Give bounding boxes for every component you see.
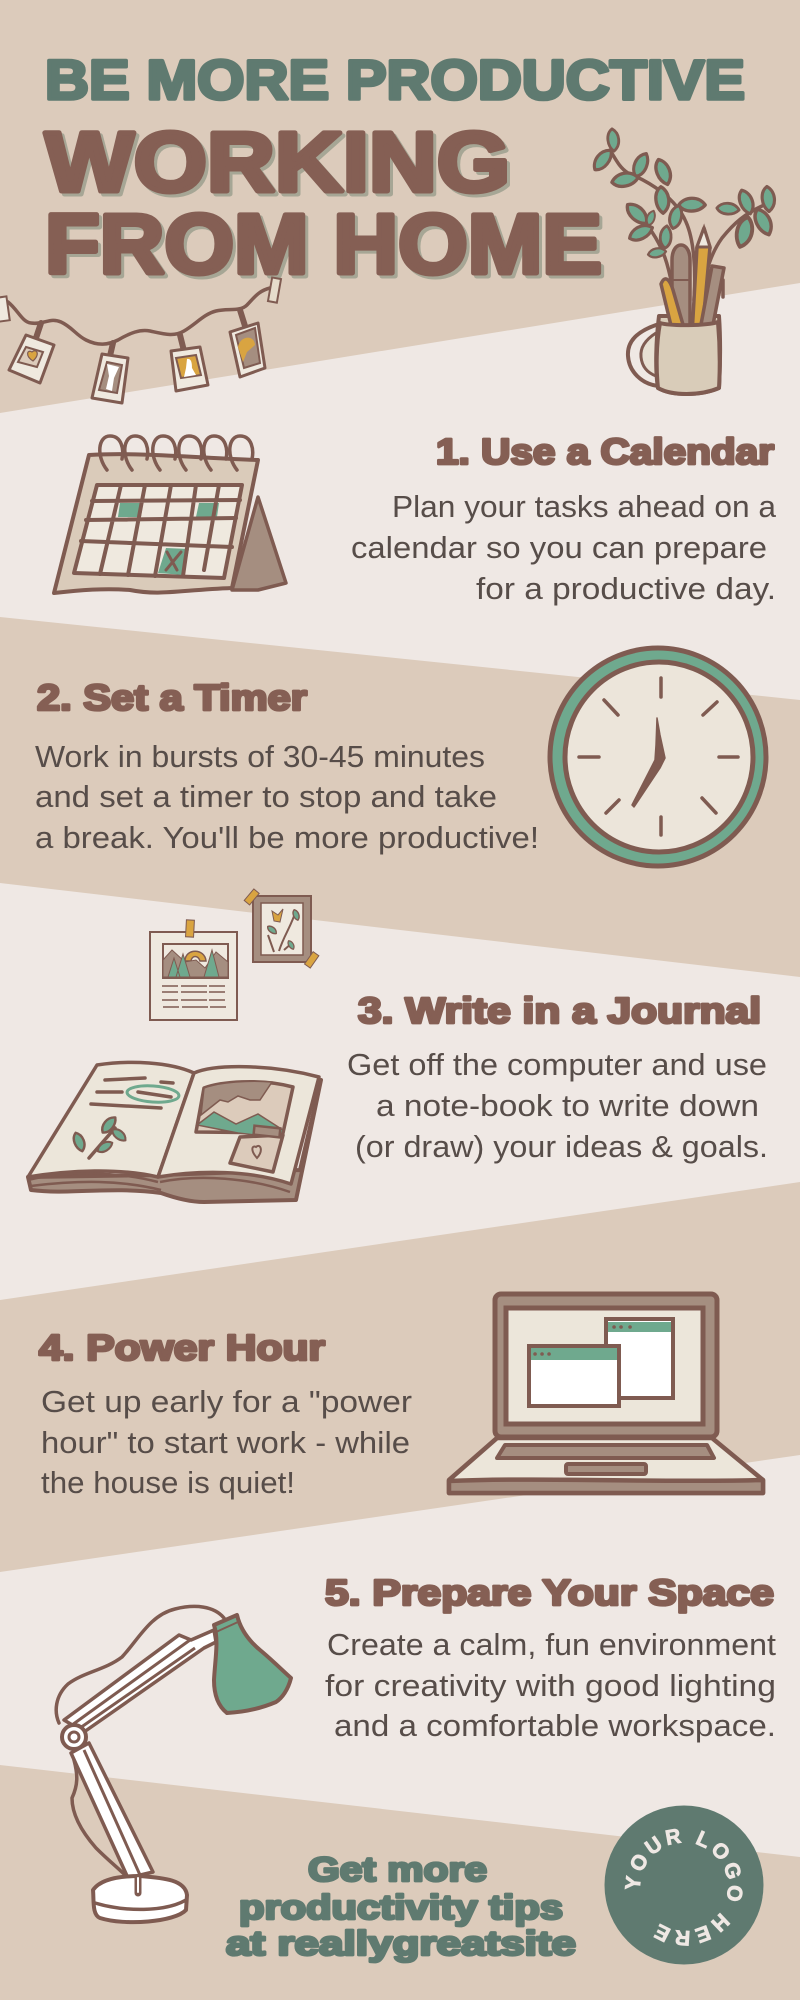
text: step 4 body: hour" to start work - while <box>41 1425 410 1460</box>
title: working from home <box>45 115 605 294</box>
text: step 2 body: Work in bursts of 30-45 minutes <box>35 739 485 774</box>
icon: photo garland <box>0 277 281 403</box>
call to action: Get more <box>308 1851 487 1889</box>
call to action: at reallygreatsite <box>226 1925 576 1963</box>
text: step 5 body: for creativity with good lighting <box>325 1668 776 1703</box>
heading: step 4: 4. Power Hour <box>39 1327 325 1368</box>
panel: step 2 <box>35 648 766 866</box>
text: step 4 body: Get up early for a "power <box>41 1384 412 1419</box>
text: step 4 body <box>41 1384 412 1500</box>
icon: open journal <box>28 1062 321 1202</box>
heading: step 1: 1. Use a Calendar <box>436 431 774 472</box>
text: step 3 body: (or draw) your ideas & goals. <box>355 1129 768 1164</box>
logo badge: YOUR LOGO HERE <box>624 1828 743 1946</box>
text: step 3 body <box>347 1047 768 1164</box>
title: working from home: WORKING <box>45 115 510 209</box>
title: working from home: FROM HOME <box>45 197 602 291</box>
text: step 3 body: a note-book to write down <box>376 1088 759 1123</box>
panel: step 5 <box>56 1572 776 1922</box>
text: step 1 body <box>351 489 777 606</box>
text: step 2 body: a break. You'll be more productive! <box>35 820 539 855</box>
text: step 1 body: for a productive day. <box>476 571 776 606</box>
text: step 1 body: Plan your tasks ahead on a <box>392 489 777 524</box>
call to action: productivity tips <box>239 1889 563 1927</box>
title: working from home: WORKING <box>48 118 513 212</box>
call to action <box>226 1851 576 1963</box>
text: step 5 body: Create a calm, fun environment <box>327 1627 776 1662</box>
panel: step 3 <box>28 889 768 1202</box>
text: step 5 body <box>325 1627 776 1743</box>
text: step 2 body <box>35 739 539 855</box>
icon: desk calendar <box>54 436 286 593</box>
heading: step 2: 2. Set a Timer <box>37 677 307 718</box>
text: step 3 body: Get off the computer and use <box>347 1047 767 1082</box>
logo badge <box>604 1806 764 1964</box>
heading: step 5: 5. Prepare Your Space <box>325 1572 774 1613</box>
text: step 2 body: and set a timer to stop and take <box>35 779 497 814</box>
icon: desk lamp <box>56 1606 291 1922</box>
icon: wall clock <box>550 648 766 866</box>
icon: laptop <box>449 1294 763 1493</box>
text: step 5 body: and a comfortable workspace. <box>334 1708 776 1743</box>
icon: framed flower picture <box>244 889 319 968</box>
text: step 4 body: the house is quiet! <box>41 1465 295 1500</box>
title: working from home: FROM HOME <box>48 200 605 294</box>
text: step 1 body: calendar so you can prepare <box>351 530 767 565</box>
heading: step 3: 3. Write in a Journal <box>358 990 761 1031</box>
panel: step 1 <box>54 431 777 606</box>
icon: mug with plants and pens <box>590 128 775 394</box>
icon: pinned paper with landscape <box>150 920 237 1020</box>
title: be more productive: BE MORE PRODUCTIVE <box>45 48 745 111</box>
panel: step 4 <box>39 1294 763 1500</box>
